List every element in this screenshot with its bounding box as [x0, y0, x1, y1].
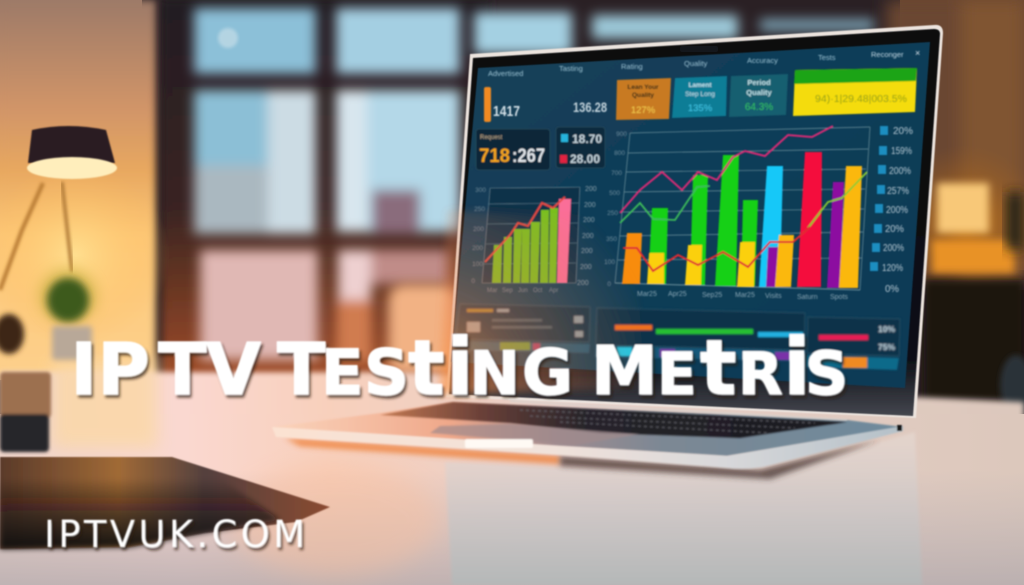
top navigation: Tests — [818, 53, 836, 62]
card: orange: Quality — [632, 92, 654, 99]
small area chart: Jun — [518, 288, 528, 294]
small area chart: 200 — [584, 202, 596, 209]
panel: 718:267: Request — [480, 135, 503, 141]
title — [70, 323, 848, 413]
bottom panels — [455, 304, 900, 370]
panel: legend values — [556, 127, 605, 168]
left wall — [0, 0, 156, 380]
title: i — [446, 323, 473, 413]
title: S — [805, 339, 848, 409]
panel: 718:267: :267 — [512, 146, 545, 167]
top navigation: Reconger — [871, 50, 904, 59]
title: IPTV — [70, 328, 261, 411]
hinge line — [510, 401, 847, 420]
small area chart: 200 — [580, 264, 592, 271]
right axis legend: 257% — [887, 186, 909, 197]
right axis legend: 200% — [883, 243, 904, 254]
small area chart — [471, 186, 597, 294]
card: teal right: Period — [747, 78, 771, 87]
small area chart: Oct — [533, 288, 543, 294]
icon: left desk lamp — [0, 126, 170, 345]
title: E — [321, 336, 363, 409]
laptop base — [272, 401, 903, 479]
dashboard on screen — [44, 48, 920, 556]
main bar and line chart: Sep25 — [702, 292, 722, 299]
blurred chair — [388, 284, 458, 374]
small area chart: 100 — [472, 261, 483, 268]
keyboard — [380, 402, 847, 438]
right axis legend: 0% — [885, 284, 899, 295]
title: G — [522, 336, 573, 409]
panel: left status — [455, 304, 590, 353]
small area chart: 200 — [581, 248, 593, 255]
top navigation — [488, 48, 920, 78]
card: yellow summary — [793, 68, 917, 116]
panel: right gauge: 10% — [878, 324, 895, 334]
title: t — [408, 323, 444, 412]
top navigation: Accuracy — [747, 56, 778, 65]
card: teal left: Lament — [688, 82, 712, 89]
small area chart: 200 — [577, 280, 589, 287]
small area chart: 200 — [583, 217, 595, 224]
main bar and line chart: 900 — [616, 131, 627, 138]
main bar and line chart — [604, 126, 913, 301]
window frame — [162, 0, 492, 380]
top navigation: Quality — [684, 59, 708, 68]
title: M — [591, 332, 658, 410]
right wall — [886, 0, 1024, 280]
title: E — [657, 340, 697, 408]
top navigation: × — [915, 48, 920, 58]
panel: 718:267 — [476, 129, 550, 170]
card: orange: Lean Your — [627, 84, 659, 91]
port — [897, 425, 902, 431]
main bar and line chart: 350 — [606, 236, 617, 243]
orange glare on screen — [440, 210, 640, 395]
card: orange: 127% — [631, 105, 656, 116]
main bar and line chart: 500 — [609, 190, 620, 197]
blurred room details — [0, 0, 1024, 415]
title: T — [277, 328, 326, 411]
main bar and line chart: 800 — [614, 150, 625, 157]
main bar and line chart: Mar25 — [637, 291, 657, 298]
small area chart: Apr — [549, 288, 558, 294]
main bar and line chart: Spots — [830, 294, 848, 301]
main bar and line chart: 250 — [607, 210, 618, 217]
metric: 1417 — [484, 87, 607, 122]
panel: legend values: 18.70 — [572, 132, 602, 146]
main bar and line chart: Visits — [765, 293, 782, 300]
small area chart: 250 — [474, 206, 485, 213]
small area chart: 0 — [471, 278, 475, 285]
dark tablet on desk — [0, 457, 330, 549]
keyboard keys — [520, 410, 815, 433]
panel: 718:267: 718 — [479, 146, 510, 167]
front edge — [272, 426, 903, 469]
right axis legend: 20% — [885, 224, 904, 235]
title: t — [700, 323, 736, 412]
card: teal left: 135% — [688, 103, 713, 114]
base top — [272, 402, 903, 456]
right axis legend: 200% — [886, 205, 908, 216]
main bar and line chart: 0 — [607, 281, 611, 288]
card: teal left — [672, 76, 727, 118]
small area chart: 200 — [582, 233, 594, 240]
card: teal right: 64.3% — [745, 102, 773, 113]
small area chart: 200 — [585, 186, 597, 193]
pale light spot in window — [218, 28, 238, 48]
right axis legend: 20% — [893, 126, 913, 137]
laptop reflection — [445, 432, 922, 585]
right axis legend: 200% — [889, 166, 911, 177]
title: S — [364, 336, 409, 409]
title: N — [470, 339, 520, 409]
site name: IPTVUK.COM — [44, 513, 305, 556]
top navigation: Tasting — [559, 64, 583, 73]
right dark furniture — [924, 280, 1024, 400]
right lamp glow — [885, 145, 1024, 305]
right axis legend: 159% — [891, 146, 912, 157]
card: teal left: Step Long — [685, 91, 715, 98]
top navigation: Rating — [621, 62, 643, 71]
small area chart: Sep — [502, 288, 513, 294]
panel: right gauge: 75% — [878, 342, 895, 352]
title: i — [784, 323, 810, 413]
title: R — [738, 340, 783, 408]
main bar and line chart: Mar25 — [735, 292, 755, 299]
right axis legend — [870, 126, 913, 295]
panel: legend values: 28.00 — [570, 152, 600, 166]
panel: progress bars — [595, 308, 805, 361]
card: yellow summary: 94)·1|29.48|003.5% — [815, 94, 907, 105]
small area chart: 200 — [472, 245, 483, 252]
right axis legend: 120% — [882, 263, 903, 274]
laptop lid — [446, 25, 943, 418]
metric: 1417: 136.28 — [573, 99, 607, 115]
main bar and line chart: Apr25 — [668, 291, 687, 298]
icon: potted plant — [0, 268, 98, 360]
desk device stack — [0, 372, 51, 452]
main bar and line chart: Saturn — [797, 294, 818, 301]
small area chart: Mar — [487, 288, 497, 294]
shadow under laptop — [285, 438, 560, 464]
card: teal right: Quality — [746, 88, 773, 97]
small area chart: 300 — [475, 187, 486, 194]
card: teal right — [729, 74, 788, 117]
webcam notch — [680, 46, 718, 52]
desk surface — [0, 360, 1024, 585]
window panes — [194, 8, 874, 362]
small area chart: 200 — [473, 226, 484, 233]
card: orange — [616, 78, 671, 120]
thumb notch — [465, 439, 533, 448]
panel: right gauge — [806, 317, 900, 370]
main bar and line chart: 100 — [604, 259, 615, 266]
trackpad — [430, 424, 640, 445]
metric: 1417: 1417 — [493, 103, 520, 120]
laptop screen — [451, 42, 930, 388]
top navigation: Advertised — [488, 69, 523, 78]
main bar and line chart: 700 — [611, 170, 622, 177]
